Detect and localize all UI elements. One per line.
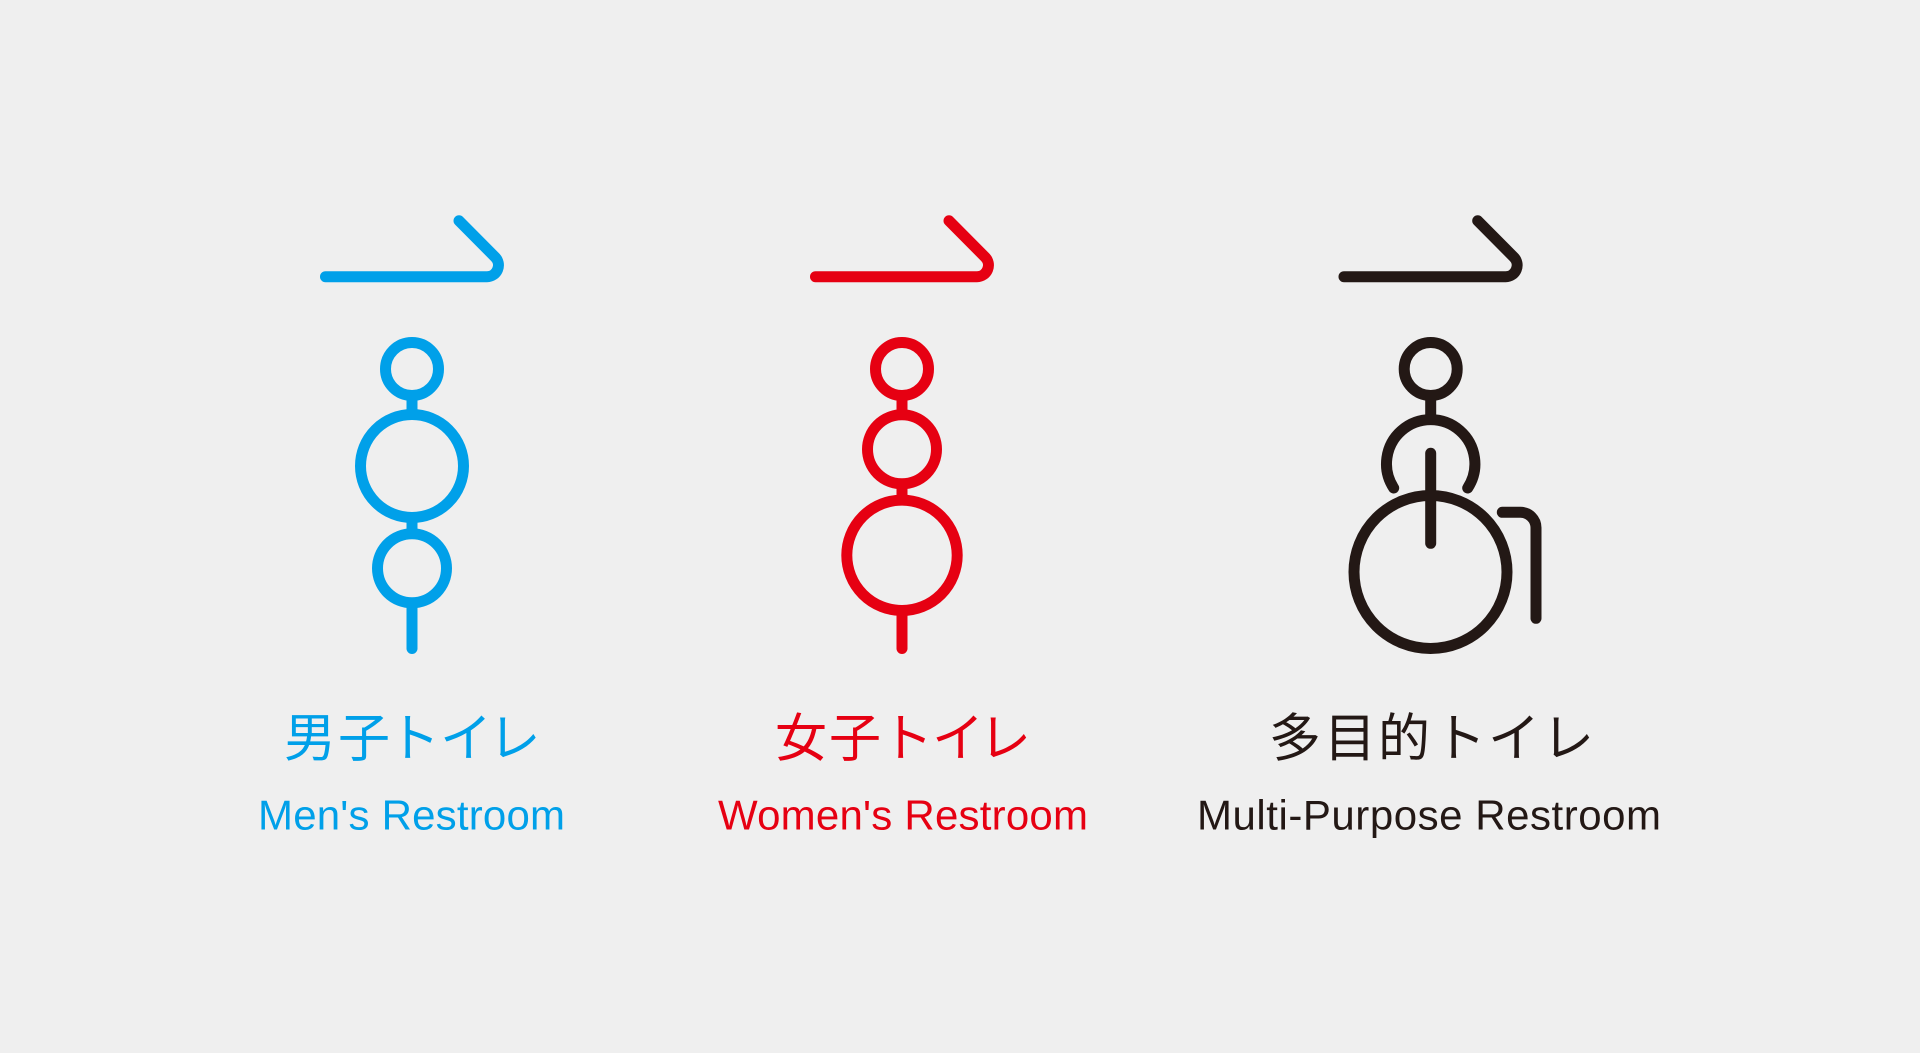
icon: wheelchair pictogram bbox=[1354, 342, 1536, 648]
label: men Japanese: 男子トイレ bbox=[284, 710, 541, 768]
panel: men's restroom bbox=[258, 221, 565, 838]
label: multi-purpose English: Multi-Purpose Restroom bbox=[1197, 791, 1661, 838]
arrow: men bbox=[326, 221, 498, 277]
panel: multi-purpose restroom bbox=[1197, 221, 1661, 838]
label: women Japanese: 女子トイレ bbox=[775, 710, 1031, 768]
icon: woman pictogram bbox=[847, 342, 957, 648]
arrow: multi-purpose bbox=[1344, 221, 1517, 277]
icon: man pictogram bbox=[360, 342, 464, 648]
label: multi-purpose Japanese: 多目的トイレ bbox=[1269, 710, 1594, 768]
arrow: women bbox=[816, 221, 988, 277]
label: women English: Women's Restroom bbox=[718, 791, 1088, 838]
label: men English: Men's Restroom bbox=[258, 791, 565, 838]
panel: women's restroom bbox=[718, 221, 1088, 838]
